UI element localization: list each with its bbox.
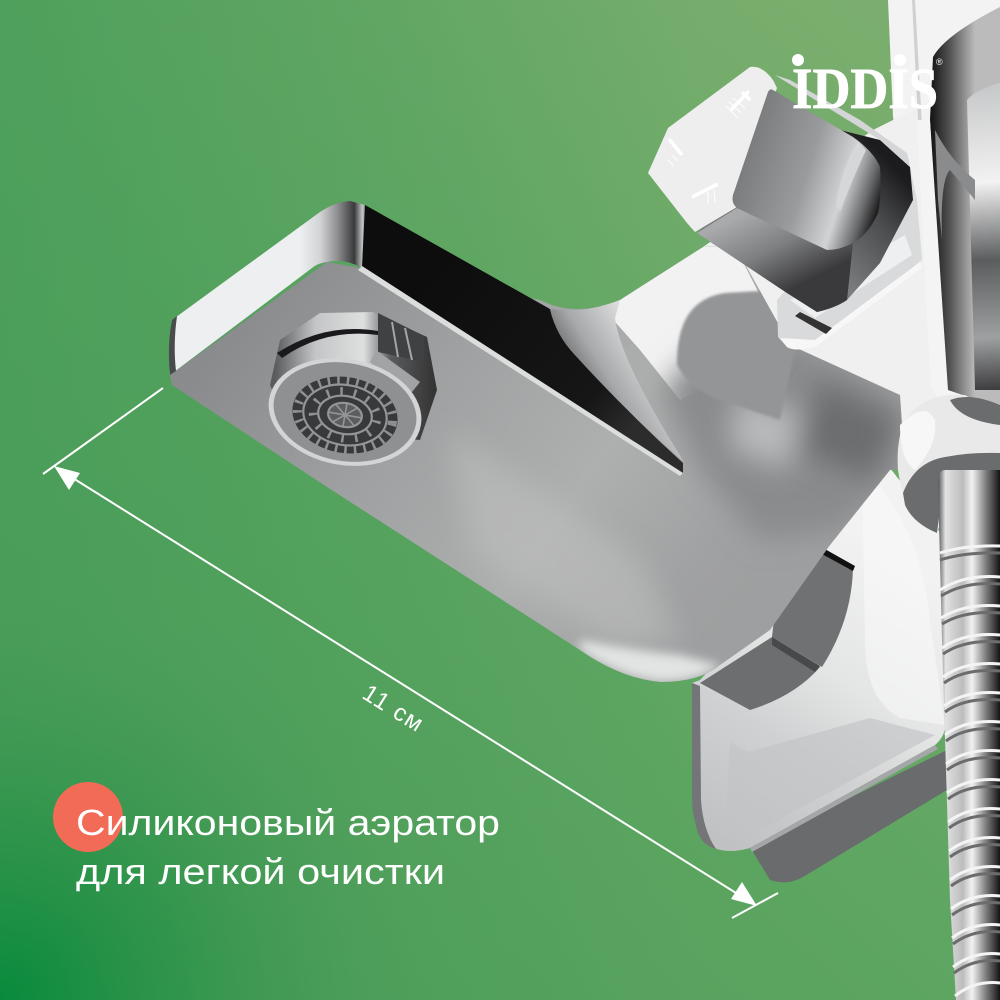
caption: [76, 802, 500, 892]
spout top band with chrome corner: [169, 201, 365, 375]
caption: Силиконовый аэратор: [76, 802, 500, 843]
wall plate top right: [703, 0, 1000, 440]
caption: для легкой очистки: [76, 851, 445, 892]
tap body in grey with soft shading: [170, 246, 905, 682]
red accent circle: [53, 782, 123, 852]
iddis logo: IDDIS: [792, 56, 938, 121]
thin light rim below black face: [358, 266, 683, 476]
spout black side face: [362, 205, 683, 473]
dimension line with arrows: [43, 388, 778, 918]
hole in plate with hexagonal block: [700, 548, 855, 710]
aerator mesh: [285, 367, 405, 463]
logo-side chrome panel: [917, 7, 1000, 416]
metal hose: [938, 470, 1000, 1000]
spout curved highlight: [550, 300, 684, 462]
handle shower icons: [668, 91, 750, 204]
dimension label: 11 см: [358, 679, 428, 737]
switch handle: [648, 67, 913, 312]
aerator: [260, 312, 437, 478]
hose holder: [898, 395, 1000, 533]
iddis logo: ®: [936, 57, 943, 67]
lower mounting plate: [692, 468, 947, 882]
switch handle mount ring: [777, 153, 922, 350]
